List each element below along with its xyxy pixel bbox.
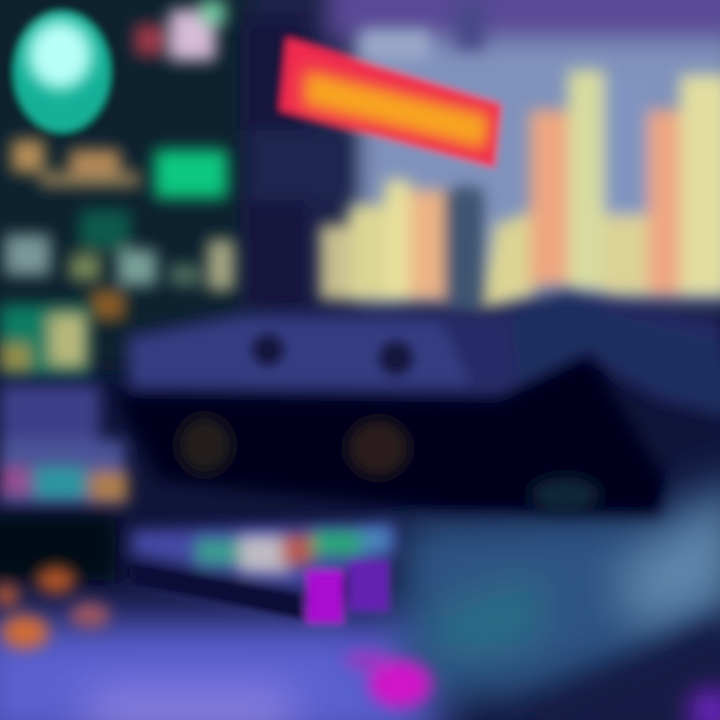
keyboard (130, 522, 395, 624)
keyboard coloured keys (195, 528, 390, 573)
floor: periwinkle (0, 620, 440, 720)
surface: dark strip lower right (490, 620, 720, 720)
left stacked panel (0, 385, 128, 505)
console top (125, 290, 720, 420)
background wall (0, 0, 720, 370)
floor and desk (0, 470, 720, 720)
left screens (0, 0, 234, 505)
console body (115, 290, 720, 515)
banner: red orange sign (280, 38, 502, 168)
orange dots lower left (0, 566, 110, 649)
surface: lower right slate (400, 470, 720, 700)
left dark base (0, 515, 115, 580)
green highlight (155, 150, 227, 198)
console cavity (115, 355, 665, 515)
orange text block (12, 140, 140, 186)
lower-left green panel (0, 305, 90, 375)
icon: coloured tile cluster (135, 0, 225, 60)
bar chart: right wall (320, 70, 720, 310)
mid-left data row (5, 210, 234, 320)
keyboard front (130, 560, 305, 622)
icon: glowing shield (14, 12, 110, 132)
console knobs (252, 334, 413, 375)
keyboard top (130, 522, 395, 590)
dark central column (245, 0, 485, 310)
magenta block (306, 560, 390, 624)
magenta floor glow (344, 650, 432, 708)
